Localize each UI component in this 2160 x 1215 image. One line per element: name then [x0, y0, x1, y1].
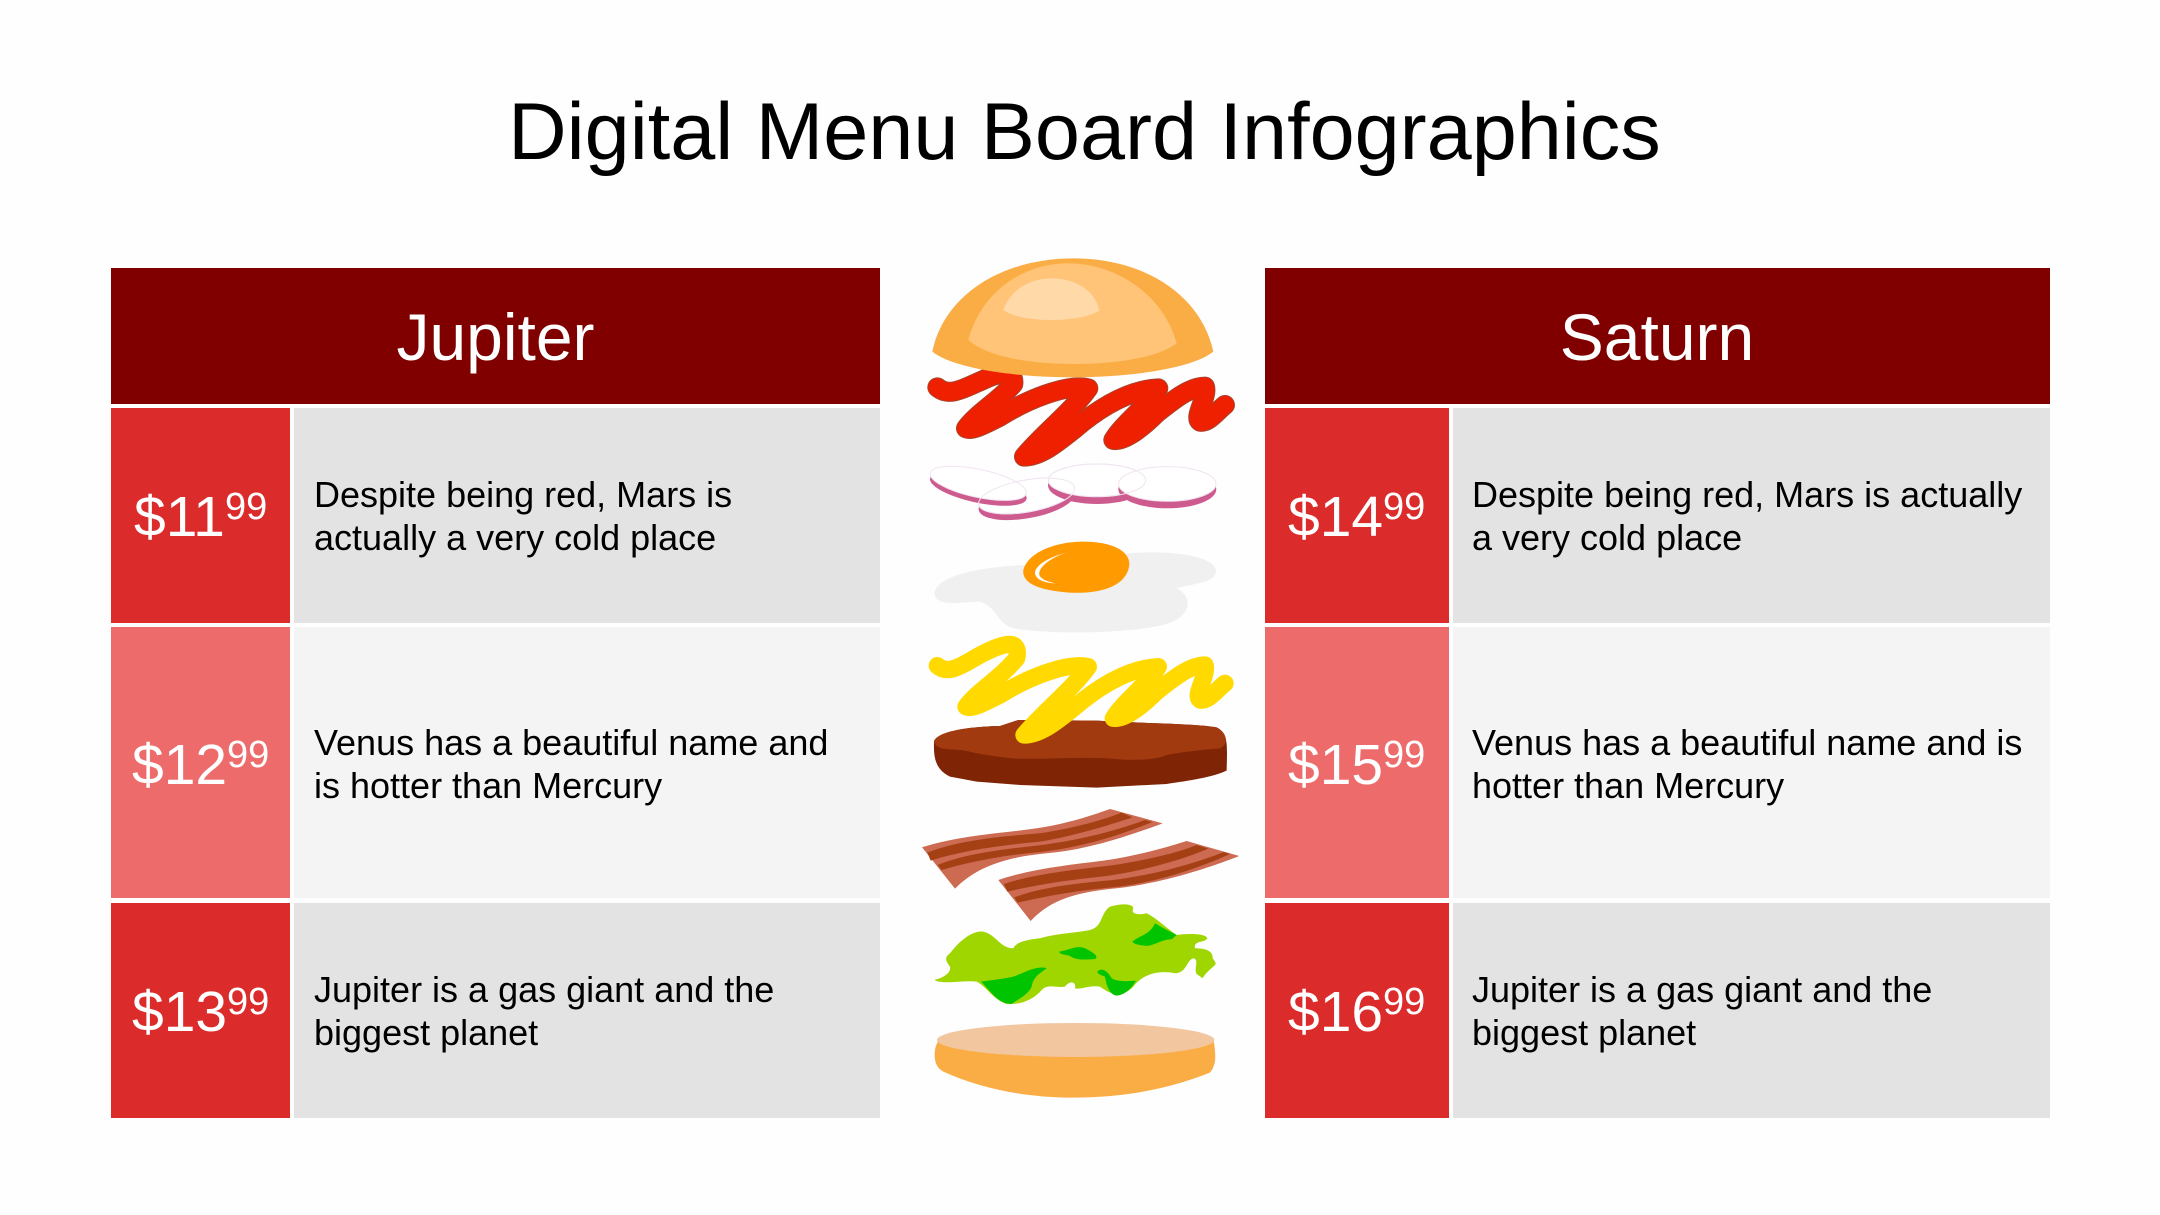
- row: $12.99: is hotter than Mercury: [314, 765, 662, 806]
- icon: bacon strips: [922, 809, 1239, 921]
- row: $11.99: Despite being red, Mars is: [314, 474, 732, 515]
- icon: bottom bun: [935, 1023, 1215, 1098]
- row: $12.99: 99: [227, 734, 269, 776]
- Saturn header: [1265, 268, 2050, 404]
- icon: mustard: [937, 644, 1225, 735]
- row: $12.99: Venus has a beautiful name and: [314, 722, 828, 763]
- row: $13.99: biggest planet: [314, 1012, 538, 1053]
- row: $12.99: $12: [132, 733, 227, 797]
- row: $16.99: biggest planet: [1472, 1012, 1696, 1053]
- row: $15.99: Venus has a beautiful name and is: [1472, 722, 2022, 763]
- row: $16.99: 99: [1383, 981, 1425, 1023]
- panel: Saturn menu: [1265, 268, 2050, 1118]
- icon: top bun: [932, 258, 1213, 377]
- row: $13.99: [111, 903, 880, 1118]
- row: $11.99: 99: [225, 486, 267, 528]
- row: $15.99: $15: [1288, 733, 1383, 797]
- row: $16.99: $16: [1288, 980, 1383, 1044]
- row: $15.99: 99: [1383, 734, 1425, 776]
- icon: lettuce: [934, 904, 1216, 1004]
- Saturn header: Saturn: [1560, 300, 1754, 374]
- row: $14.99: 99: [1383, 486, 1425, 528]
- row: $11.99: actually a very cold place: [314, 517, 716, 558]
- row: $16.99: [1265, 903, 2050, 1118]
- row: $15.99: [1265, 627, 2050, 898]
- row: $12.99: [111, 627, 880, 898]
- row: $13.99: $13: [132, 980, 227, 1044]
- Jupiter header: [111, 268, 880, 404]
- row: $11.99: $11: [134, 485, 225, 549]
- row: $14.99: a very cold place: [1472, 517, 1742, 558]
- row: $14.99: Despite being red, Mars is actually: [1472, 474, 2022, 515]
- icon: patty: [934, 720, 1227, 788]
- row: $16.99: Jupiter is a gas giant and the: [1472, 969, 1932, 1010]
- icon: onion slices: [927, 459, 1216, 527]
- row: $11.99: [111, 408, 880, 623]
- Jupiter header: Jupiter: [396, 300, 595, 374]
- row: $13.99: 99: [227, 981, 269, 1023]
- illustration: exploded burger: [922, 258, 1239, 1098]
- row: $14.99: [1265, 408, 2050, 623]
- icon: ketchup: [937, 374, 1225, 457]
- row: $14.99: $14: [1288, 485, 1383, 549]
- panel: Jupiter menu: [111, 268, 880, 1118]
- title: Digital Menu Board Infographics: [508, 87, 1661, 177]
- row: $15.99: hotter than Mercury: [1472, 765, 1784, 806]
- row: $13.99: Jupiter is a gas giant and the: [314, 969, 774, 1010]
- icon: fried egg: [934, 542, 1216, 632]
